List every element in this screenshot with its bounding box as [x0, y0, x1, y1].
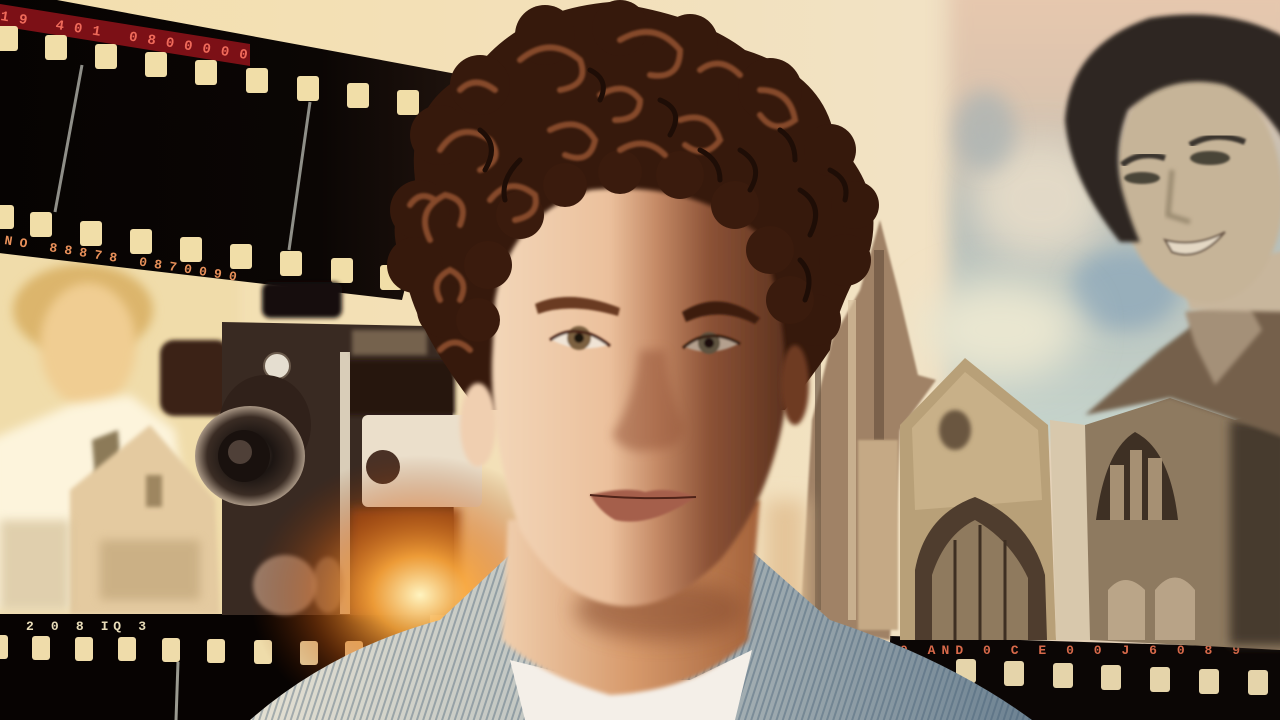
main arched window: [915, 497, 1047, 640]
face: [1102, 57, 1280, 313]
bottom left film strip: [0, 614, 430, 720]
hair back mass: [387, 0, 879, 410]
orange light flare: [250, 455, 590, 720]
collar: [1185, 298, 1262, 385]
hair: [1065, 14, 1280, 242]
eyes: [1124, 172, 1160, 184]
edge print: top: 19 401 0800000: [0, 9, 249, 64]
brows: [1122, 155, 1165, 165]
perforations: bottom row: [0, 205, 402, 290]
sepia photo: boy and house: [0, 250, 240, 620]
white undershirt: [510, 650, 752, 720]
jacket: [1085, 305, 1280, 440]
nose shadow: [1168, 170, 1190, 222]
silver side panel: [362, 415, 482, 507]
perforations: [956, 659, 1268, 695]
film camera: [160, 282, 482, 616]
mouth: [590, 490, 696, 522]
smile: [1165, 232, 1225, 254]
boy's face: [40, 283, 136, 407]
small lower arches: [1108, 580, 1145, 640]
left eye: [550, 326, 610, 350]
vintage portrait: young man upper right: [1065, 14, 1280, 440]
right eyebrow: [682, 301, 760, 324]
tower: [800, 220, 936, 640]
perforations: [0, 635, 363, 665]
nose: [612, 350, 684, 451]
face: [492, 188, 786, 606]
gothic church: [765, 220, 1280, 650]
right arched window: [1096, 432, 1178, 520]
boy's shirt: [0, 395, 200, 610]
left eyebrow: [535, 297, 620, 316]
central gable: [900, 358, 1056, 640]
central man portrait: [250, 0, 1032, 720]
frame dividers: [55, 65, 310, 250]
boy's hair: [13, 264, 153, 356]
camera lens: [195, 375, 311, 506]
edge print: 0 AND 0 C E 0 0 J 6 0 8 9: [900, 643, 1240, 658]
dial: [264, 353, 290, 379]
neck: [1180, 250, 1280, 312]
neck: [502, 500, 760, 695]
bottom right film strip: [890, 636, 1280, 720]
camera top handle: [262, 282, 342, 318]
ear right: [781, 345, 809, 425]
collar and tie: [92, 430, 122, 490]
camera rear cylinder: [160, 340, 230, 416]
camera body: [222, 322, 455, 615]
chin shadow on neck: [575, 580, 745, 640]
small house: [70, 425, 220, 615]
red edge band: [0, 4, 250, 66]
right eye: [683, 332, 740, 354]
engraved lower plate: [253, 555, 317, 615]
hair fringe and curls: [410, 32, 846, 350]
perforations: top row: [0, 26, 419, 115]
edge print: bottom: NO 88878 0870090: [3, 233, 238, 285]
ear: [460, 383, 496, 467]
shirt: [250, 545, 1032, 720]
camera nameplate: [352, 330, 427, 355]
film strip: top left: [0, 0, 462, 300]
right wing: [1050, 420, 1090, 640]
edge print: 2 0 8 IQ 3: [26, 619, 146, 634]
